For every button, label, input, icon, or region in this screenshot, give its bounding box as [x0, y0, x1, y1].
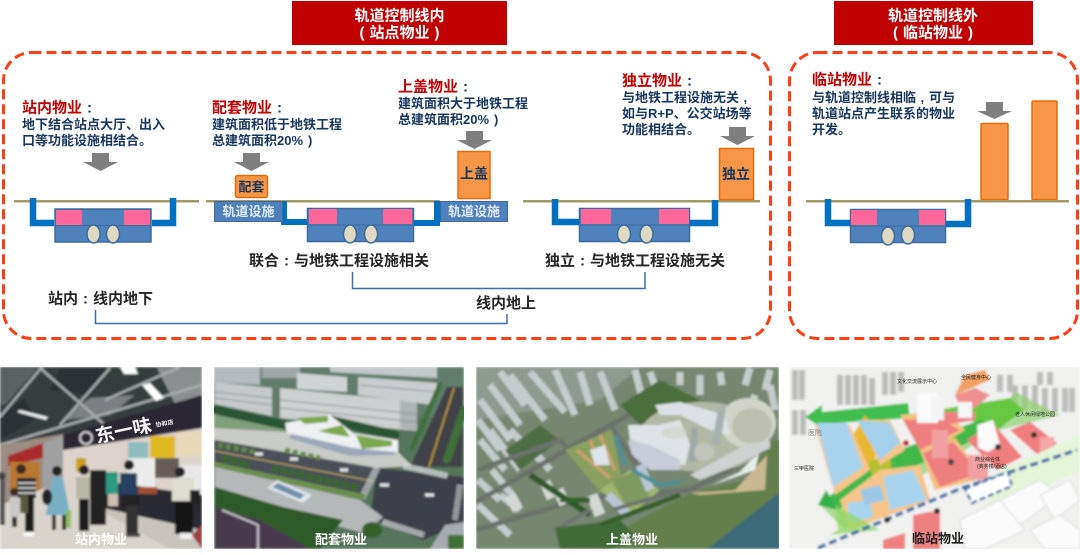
diagram: adjacent section: [806, 199, 1069, 245]
text: in-station property: 站内物业 :: [22, 98, 92, 116]
caption: over-track: 上盖物业: [606, 532, 658, 547]
label: above ground: 线内地上: [476, 294, 536, 312]
text: in-station property: 口等功能设施相结合。: [22, 133, 152, 148]
box: independent building: 独立: [722, 166, 750, 182]
text: in-station property: 地下结合站点大厅、出入: [22, 117, 165, 132]
box: independent building: [720, 148, 754, 200]
panel: station properties: [4, 52, 770, 338]
photo: adjacent property map: (商务楼/酒店): [977, 463, 1007, 470]
text: independent property: 与地铁工程设施无关 ,: [622, 90, 747, 105]
photo: in-station property: 东一味: [93, 414, 154, 448]
header: outside control line: [834, 1, 1033, 45]
bracket: combined and independent: [352, 272, 645, 288]
photo: adjacent property map: 医院: [808, 428, 822, 437]
diagram: independent section: [523, 199, 760, 243]
text: ancillary property: [212, 98, 342, 148]
box: over-track building: [458, 152, 490, 198]
diagram: in-station section: [14, 198, 199, 243]
diagram: combined section: [206, 200, 440, 243]
box: over-track building: 上盖: [460, 166, 488, 182]
text: in-station property: [22, 98, 165, 148]
text: independent property: 独立物业 :: [622, 72, 692, 90]
box: ancillary building: 配套: [238, 180, 265, 194]
box: rail facility right: 轨道设施: [448, 204, 500, 219]
photo: adjacent property map: 文化交流展示中心: [897, 378, 937, 385]
text: adjacent property: 与轨道控制线相临 , 可与: [812, 90, 955, 105]
text: adjacent property: 轨道站点产生联系的物业: [812, 106, 955, 121]
label: combined: 联合 : 与地铁工程设施相关: [249, 252, 429, 270]
photo: ancillary property: [214, 367, 464, 549]
header: outside control line: 轨道控制线外: [888, 6, 978, 24]
label: in-station underground: 站内 : 线内地下: [48, 290, 153, 308]
text: adjacent property: [812, 70, 955, 137]
box: adjacent building short: [981, 124, 1008, 200]
arrow: ancillary: [234, 153, 269, 171]
photo: in-station property: [0, 367, 202, 549]
box: rail facility right: [440, 202, 508, 222]
label: independent: 独立 : 与地铁工程设施无关: [545, 252, 725, 270]
photo: adjacent property map: 全民健身中心: [961, 374, 991, 381]
photo: adjacent property map: 老人休闲绿地公园: [1015, 411, 1055, 418]
arrow: independent: [720, 127, 755, 145]
photo: adjacent property map: 三甲医院: [794, 465, 814, 472]
bracket: underground and above ground: [96, 310, 507, 324]
header: outside control line: ( 临站物业 ): [893, 24, 973, 42]
header: inside control line: [292, 1, 507, 45]
photo: over-track property: [476, 367, 780, 549]
arrow: adjacent: [977, 102, 1012, 119]
text: over-track property: [398, 78, 528, 127]
photo: adjacent property map: [789, 367, 1080, 549]
photo: adjacent property map: 商业综合体: [975, 456, 1000, 463]
text: ancillary property: 配套物业 :: [212, 98, 282, 116]
caption: in-station: 站内物业: [75, 532, 127, 547]
text: independent property: 如与R+P、公交站场等: [622, 106, 752, 121]
text: ancillary property: 建筑面积低于地铁工程: [212, 117, 342, 132]
header: inside control line: 轨道控制线内: [354, 6, 445, 24]
text: ancillary property: 总建筑面积20% ): [212, 133, 312, 148]
header: inside control line: ( 站点物业 ): [359, 24, 440, 42]
box: rail facility left: 轨道设施: [222, 204, 275, 219]
arrow: in-station: [83, 153, 118, 171]
text: over-track property: 总建筑面积20% ): [398, 112, 498, 127]
arrow: over-track: [457, 131, 492, 149]
caption: adjacent: 临站物业: [912, 531, 964, 546]
box: rail facility left: [214, 202, 282, 222]
box: adjacent building tall: [1032, 101, 1057, 200]
photo: in-station property: 协和店: [155, 418, 174, 429]
text: over-track property: 建筑面积大于地铁工程: [398, 96, 528, 111]
text: adjacent property: 开发。: [812, 122, 851, 137]
panel: adjacent-station property: [790, 52, 1078, 338]
text: over-track property: 上盖物业 :: [398, 78, 468, 96]
text: independent property: 功能相结合。: [622, 122, 700, 137]
text: adjacent property: 临站物业 :: [812, 70, 882, 88]
caption: ancillary: 配套物业: [315, 532, 367, 547]
box: ancillary building: [236, 176, 268, 198]
text: independent property: [622, 72, 752, 137]
